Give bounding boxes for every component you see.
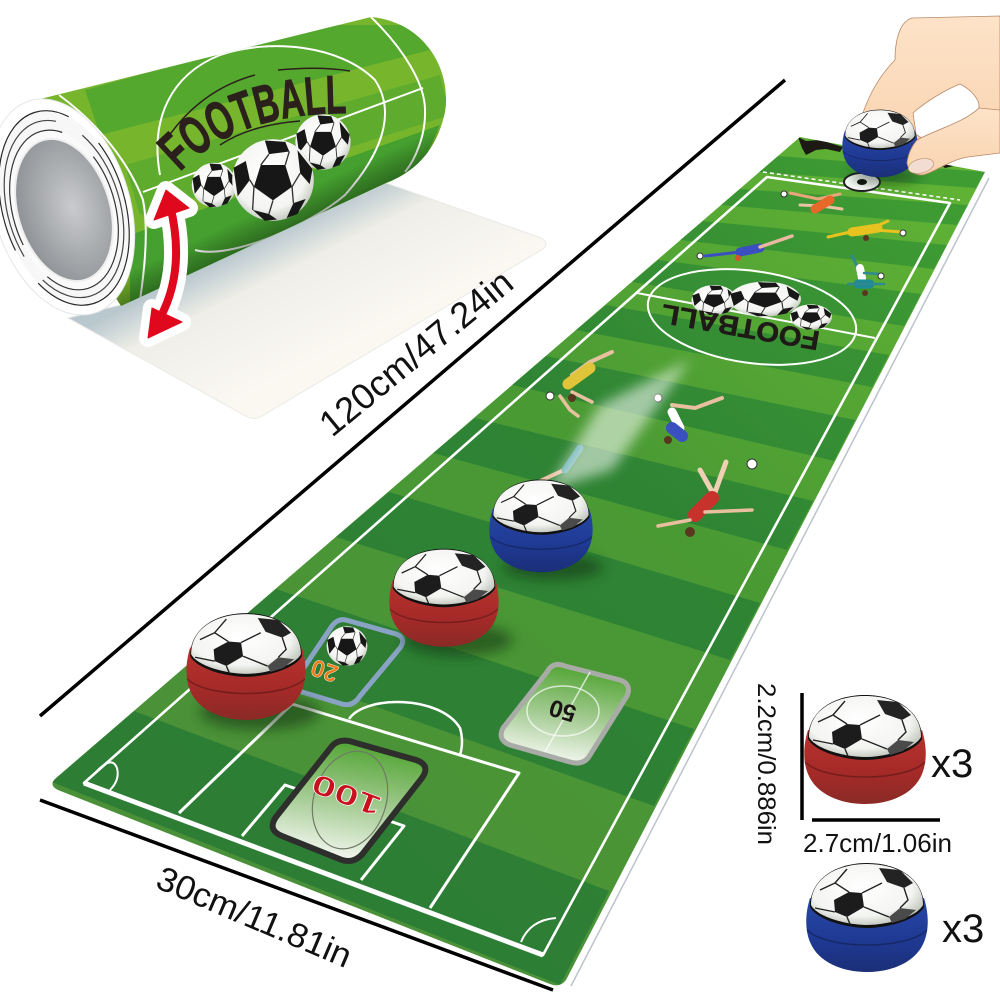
dimension line: length: [40, 80, 785, 716]
blue puck: [806, 863, 928, 972]
red puck: [804, 695, 926, 804]
thumb nail: [907, 156, 935, 176]
centre title FOOTBALL: FOOTBALL: [659, 298, 822, 356]
thumb: [907, 108, 1000, 175]
panel: playing mat: [52, 137, 990, 988]
mat edge: [47, 172, 990, 990]
width label: 2.7cm/1.06in: [803, 828, 952, 858]
panel: rolled mat: [0, 17, 546, 419]
hand: [860, 16, 1000, 153]
red quantity: x3: [931, 742, 973, 786]
white underside of the unrolled mat: [68, 183, 546, 418]
roll footballs: [192, 114, 351, 221]
centre circle footballs: [692, 282, 832, 330]
card: 20 points: [294, 620, 403, 705]
player: behind blue puck: [538, 448, 580, 482]
card: 50 points: [501, 664, 628, 763]
card: 100 points: 100: [307, 767, 386, 822]
player: near yellow: [546, 352, 612, 416]
dimension label: 120cm/47.24in: 120cm/47.24in: [311, 261, 521, 444]
width line: [812, 818, 940, 822]
panel: hand placing puck: [842, 16, 1000, 177]
puck: blue, held: [842, 110, 918, 177]
player: near red: [658, 459, 757, 537]
card: 20 points: 20: [308, 653, 342, 687]
puck shadows: [200, 168, 921, 730]
mat stripes: [52, 137, 985, 986]
player: teal: [848, 256, 884, 296]
puck: red, near: [186, 613, 306, 720]
speed trail: [548, 360, 690, 490]
far goal ball: [844, 173, 880, 191]
spiral roll end: [0, 81, 159, 333]
player: orange: [781, 191, 842, 209]
dimension line: width: [40, 800, 553, 990]
puck: blue, middle: [489, 480, 593, 572]
right edge shading: [571, 178, 989, 986]
player: yellow: [828, 221, 906, 241]
card: 50 points: 50: [546, 693, 580, 727]
field markings: [84, 172, 960, 955]
roll title FOOTBALL: FOOTBALL: [156, 76, 346, 171]
blue quantity: x3: [942, 907, 984, 951]
arrow: roll diameter: [148, 190, 189, 338]
height line: [800, 693, 804, 820]
height label: 2.2cm/0.886in: [752, 683, 780, 845]
player: blue: [697, 236, 792, 261]
player: near blue: [654, 394, 722, 444]
dimension label: 30cm/11.81in: 30cm/11.81in: [151, 859, 357, 976]
panel: puck sizes: [752, 683, 984, 972]
green roll body: [42, 17, 446, 306]
card: 100 points: [273, 741, 425, 861]
puck: red, middle: [389, 549, 499, 647]
